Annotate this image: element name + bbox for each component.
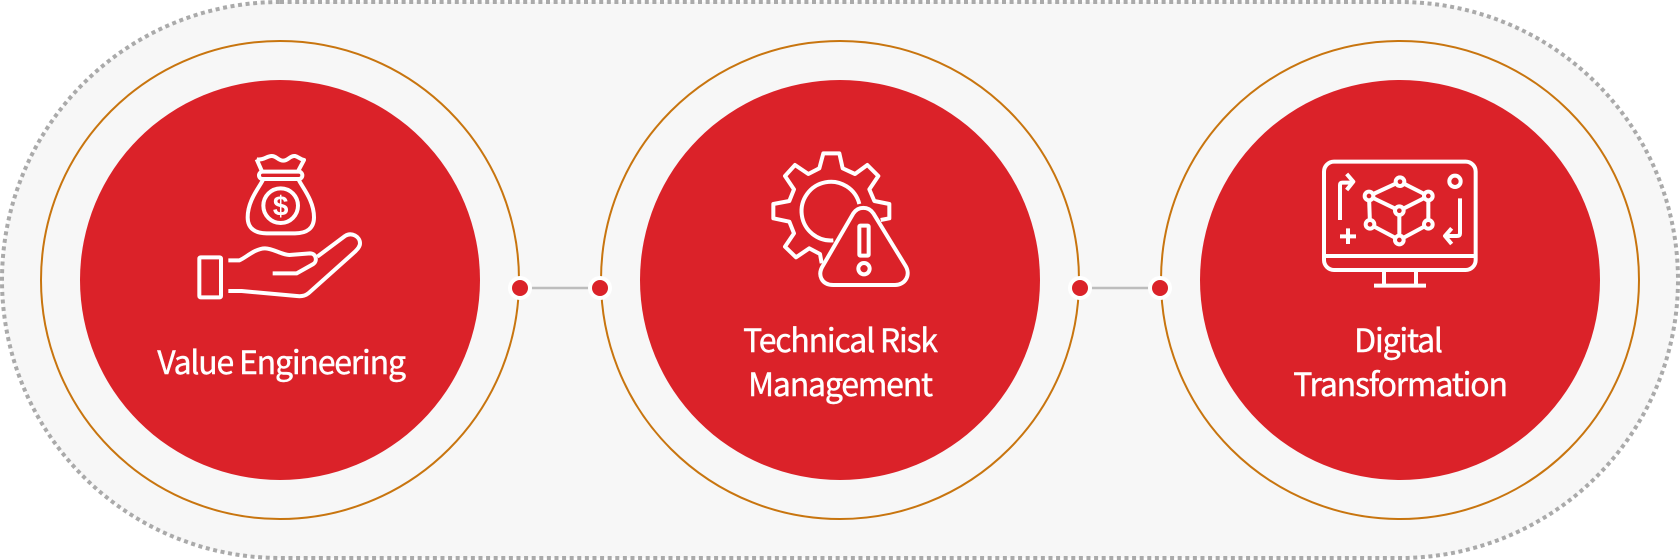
icon: gear with warning triangle	[773, 153, 908, 285]
heading: Digital Transformation: Transformation	[1293, 360, 1507, 406]
heading: Digital Transformation	[1293, 316, 1507, 406]
icon: monitor with 3D cube	[1324, 162, 1476, 286]
heading: Technical Risk Management: Technical Risk	[743, 316, 938, 362]
heading: Technical Risk Management: Management	[748, 360, 933, 406]
heading: Digital Transformation: Digital	[1354, 316, 1442, 362]
heading: Value Engineering: Value Engineering	[157, 338, 406, 384]
panel: Value Engineering	[41, 41, 519, 519]
panel: Digital Transformation	[1161, 41, 1639, 519]
heading: Technical Risk Management	[743, 316, 938, 406]
icon: money bag on hand	[199, 156, 360, 297]
panel: Technical Risk Management	[601, 41, 1079, 519]
connector: second to third	[1080, 287, 1160, 289]
connector dots	[508, 276, 1172, 300]
icon: money bag on hand: $	[273, 190, 289, 221]
connector: first to second	[520, 287, 600, 289]
